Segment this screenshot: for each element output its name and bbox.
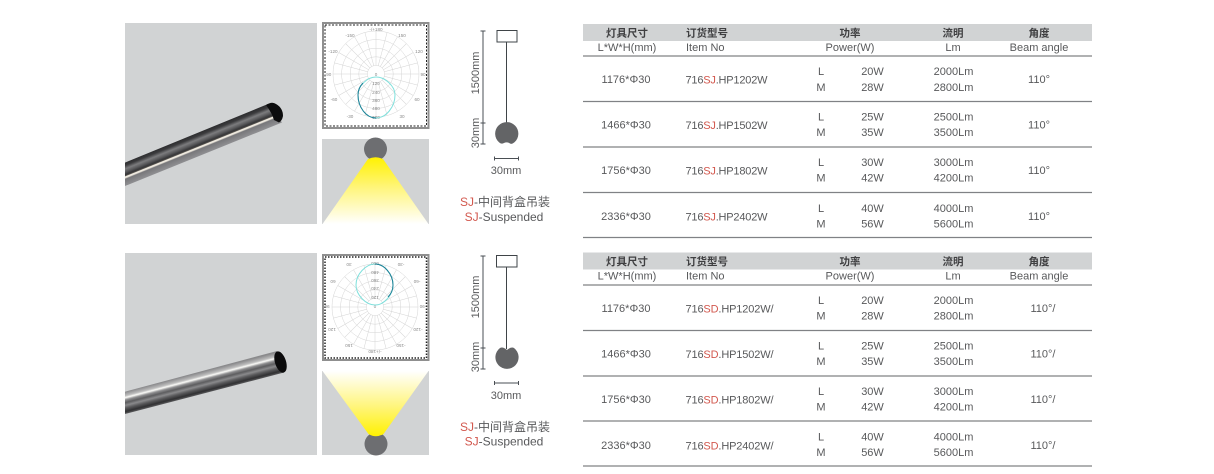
polar labels, inverted: 600 bbox=[371, 261, 379, 266]
table header: Power(W) bbox=[826, 270, 874, 282]
polar labels, inverted: 150 bbox=[345, 343, 353, 348]
row: 1176: M bbox=[816, 310, 826, 322]
polar labels: -120 bbox=[328, 49, 338, 54]
polar labels, inverted: 240 bbox=[371, 286, 379, 291]
row: 1756: 4200Lm bbox=[934, 172, 973, 184]
row: 2336: 4000Lm bbox=[934, 203, 973, 215]
row: 1176: 110°/ bbox=[1030, 303, 1056, 315]
table header: Beam angle bbox=[1010, 270, 1068, 282]
row: 1756 bbox=[601, 157, 1050, 184]
table: bottom specifications bbox=[583, 252, 1092, 466]
polar labels: 120 bbox=[372, 81, 380, 86]
row: 2336: L bbox=[818, 432, 824, 444]
row: 1466: 716SJ.HP1502W bbox=[686, 120, 768, 132]
height label: 1500mm bbox=[470, 276, 482, 318]
row: 1466: 35W bbox=[861, 356, 884, 368]
caption: bottom fixture: SJ-中间背盒吊装 bbox=[460, 419, 550, 434]
row: 1756: 1756*Φ30 bbox=[601, 394, 651, 406]
fixture section circle bbox=[364, 138, 387, 160]
fixture cross section bbox=[495, 122, 518, 144]
polar labels, inverted: 0 bbox=[373, 304, 376, 309]
table header: 灯具尺寸 bbox=[606, 26, 648, 40]
polar labels: 0 bbox=[375, 124, 378, 129]
row: 1176: 2800Lm bbox=[934, 82, 973, 94]
polar labels: -30 bbox=[347, 114, 354, 119]
caption: top fixture: SJ-中间背盒吊装 bbox=[460, 194, 550, 209]
row: 1176: 2000Lm bbox=[934, 66, 973, 78]
row: 1176: 1176*Φ30 bbox=[602, 74, 650, 86]
row: 1756: 110°/ bbox=[1030, 394, 1056, 406]
polar labels, inverted bbox=[324, 254, 426, 354]
light beam bbox=[322, 157, 428, 224]
vertical dimension lines bbox=[480, 31, 486, 144]
row: 2336: 110° bbox=[1028, 211, 1050, 223]
row: 1756: 30W bbox=[861, 157, 884, 169]
row: 2336: L bbox=[818, 203, 824, 215]
row: 1466: 35W bbox=[861, 127, 884, 139]
table header: 角度 bbox=[1028, 255, 1050, 268]
suspension cable bbox=[506, 267, 508, 349]
polar labels, inverted: -/+180 bbox=[368, 349, 382, 354]
row: 1466: 2500Lm bbox=[934, 112, 973, 124]
fixture cross section bbox=[495, 348, 519, 369]
row: 1756: 42W bbox=[861, 172, 884, 184]
row: 2336 bbox=[601, 432, 1056, 459]
lamp body, bottom fixture bbox=[125, 351, 284, 414]
polar labels, inverted: 60 bbox=[330, 279, 336, 284]
row: 1756: L bbox=[818, 157, 824, 169]
row: 2336: M bbox=[816, 447, 826, 459]
polar labels, inverted: 360 bbox=[371, 278, 379, 283]
row: 2336: 5600Lm bbox=[934, 218, 973, 230]
row: 2336: 56W bbox=[861, 218, 884, 230]
row: 2336: 110°/ bbox=[1030, 440, 1056, 452]
row: 1466: 1466*Φ30 bbox=[601, 120, 651, 132]
row: 2336 bbox=[601, 203, 1050, 230]
row: 1466: 3500Lm bbox=[934, 127, 973, 139]
row: 1466 bbox=[601, 340, 1056, 368]
panel: polar light distribution, top fixture bbox=[323, 23, 428, 129]
row: 1466: 110° bbox=[1028, 120, 1050, 132]
polar labels, inverted: 90 bbox=[324, 304, 330, 309]
width label: 30mm bbox=[491, 390, 521, 402]
row: 2336: 2336*Φ30 bbox=[601, 440, 651, 452]
row: 1756: M bbox=[816, 172, 826, 184]
row: 2336: M bbox=[816, 218, 826, 230]
polar labels: -150 bbox=[345, 33, 355, 38]
row: 2336: 716SJ.HP2402W bbox=[686, 212, 768, 224]
row: 1466: 716SD.HP1502W/ bbox=[686, 349, 774, 361]
panel: beam diagram, top fixture bbox=[322, 138, 429, 224]
row: 2336: 2336*Φ30 bbox=[601, 211, 651, 223]
row: 1176: 1176*Φ30 bbox=[602, 303, 650, 315]
row: 1466: 2500Lm bbox=[934, 340, 973, 352]
table header: Beam angle bbox=[1010, 42, 1068, 54]
row: 1176: 2800Lm bbox=[934, 310, 973, 322]
row: 1756: 110° bbox=[1028, 165, 1050, 177]
polar labels, inverted: -30 bbox=[397, 262, 404, 267]
row: 2336: 716SD.HP2402W/ bbox=[686, 440, 774, 452]
table header bbox=[583, 252, 1092, 282]
caption: bottom fixture: SJ-Suspended bbox=[465, 434, 543, 448]
row: 1466: 25W bbox=[861, 112, 884, 124]
row: 1466: M bbox=[816, 356, 826, 368]
row: 1756: 42W bbox=[861, 402, 884, 414]
row: 1756: 716SJ.HP1802W bbox=[686, 166, 768, 178]
row: 1176: L bbox=[818, 66, 824, 78]
panel: mounting dimensions, bottom fixture bbox=[470, 256, 521, 402]
panel: polar light distribution, bottom fixture bbox=[323, 254, 428, 360]
polar labels, inverted: -90 bbox=[419, 304, 426, 309]
polar labels, inverted: -60 bbox=[413, 279, 420, 284]
row: 1466: 1466*Φ30 bbox=[601, 348, 651, 360]
polar labels: 240 bbox=[372, 90, 380, 95]
polar grid bbox=[332, 264, 418, 350]
row: 2336: 56W bbox=[861, 447, 884, 459]
ceiling box bbox=[497, 30, 517, 42]
table header: 功率 bbox=[840, 26, 861, 40]
polar labels: 150 bbox=[398, 33, 406, 38]
row: 1466: 25W bbox=[861, 340, 884, 352]
row: 1176: 716SD.HP1202W/ bbox=[686, 304, 774, 316]
row: 2336: 5600Lm bbox=[934, 447, 973, 459]
polar curve bbox=[358, 77, 395, 118]
table header: Lm bbox=[945, 42, 961, 54]
polar labels: 60 bbox=[414, 97, 420, 102]
table header: L*W*H(mm) bbox=[598, 42, 656, 54]
row: 1466 bbox=[601, 112, 1050, 139]
table header: 功率 bbox=[840, 255, 861, 268]
row: 1756: 3000Lm bbox=[934, 157, 973, 169]
drop label: 30mm bbox=[470, 118, 482, 148]
fixture section circle bbox=[364, 432, 388, 456]
table header: 流明 bbox=[942, 26, 964, 40]
panel: mounting dimensions, top fixture bbox=[470, 30, 521, 177]
row: 1176: 2000Lm bbox=[934, 295, 973, 307]
panel: product photo, bottom fixture bbox=[125, 253, 317, 455]
polar labels, inverted: -120 bbox=[413, 327, 423, 332]
table header bbox=[583, 24, 1092, 54]
row: 1756: 1756*Φ30 bbox=[601, 165, 651, 177]
row: 1176: 28W bbox=[861, 82, 884, 94]
row: 1756: 4200Lm bbox=[934, 402, 973, 414]
light beam bbox=[322, 371, 428, 436]
table header: Item No bbox=[686, 42, 725, 54]
polar curve bbox=[356, 264, 393, 305]
polar labels, inverted: 480 bbox=[371, 270, 379, 275]
lamp end cap, top fixture bbox=[266, 103, 283, 122]
width label: 30mm bbox=[491, 165, 521, 177]
table header: L*W*H(mm) bbox=[598, 270, 656, 282]
row: 1176: 20W bbox=[861, 66, 884, 78]
polar labels, inverted: 120 bbox=[371, 295, 379, 300]
row: 1756: 716SD.HP1802W/ bbox=[686, 394, 774, 406]
row: 1176: 20W bbox=[861, 295, 884, 307]
lamp body, top fixture bbox=[125, 104, 282, 186]
table header: Power(W) bbox=[826, 42, 874, 54]
table header: Lm bbox=[945, 270, 961, 282]
polar labels: 480 bbox=[372, 106, 380, 111]
panel: beam diagram, bottom fixture bbox=[322, 371, 429, 456]
vertical dimension lines bbox=[480, 256, 486, 369]
polar labels bbox=[325, 27, 426, 129]
panel: product photo, top fixture bbox=[125, 23, 317, 224]
row: 2336: 4000Lm bbox=[934, 432, 973, 444]
table header: 灯具尺寸 bbox=[606, 255, 648, 268]
table: top specifications bbox=[583, 24, 1092, 238]
row: 1756: L bbox=[818, 386, 824, 398]
row: 1466: 3500Lm bbox=[934, 356, 973, 368]
polar labels: 90 bbox=[420, 72, 426, 77]
row: 2336: 40W bbox=[861, 432, 884, 444]
row: 1756: 3000Lm bbox=[934, 386, 973, 398]
polar labels: -90 bbox=[325, 72, 332, 77]
row: 1756 bbox=[601, 386, 1056, 414]
horizontal dimension line bbox=[494, 156, 518, 160]
polar labels: 30 bbox=[399, 114, 405, 119]
row: 1176: L bbox=[818, 295, 824, 307]
polar labels: 600 bbox=[372, 115, 380, 120]
drop label: 30mm bbox=[470, 342, 482, 372]
lamp end cap, bottom fixture bbox=[272, 350, 289, 374]
polar labels: -60 bbox=[331, 97, 338, 102]
suspension cable bbox=[506, 42, 508, 123]
polar labels, inverted: 30 bbox=[346, 262, 352, 267]
row: 2336: 40W bbox=[861, 203, 884, 215]
ceiling box bbox=[496, 256, 517, 267]
polar labels, inverted: 120 bbox=[328, 327, 336, 332]
row: 1466: 110°/ bbox=[1030, 348, 1056, 360]
row: 1176 bbox=[602, 66, 1050, 94]
polar labels: -/+180 bbox=[369, 27, 383, 32]
table header: 订货型号 bbox=[686, 26, 728, 40]
row: 1756: M bbox=[816, 402, 826, 414]
row: 1466: L bbox=[818, 112, 824, 124]
polar labels: 360 bbox=[372, 98, 380, 103]
table header: Item No bbox=[686, 270, 725, 282]
row: 1466: M bbox=[816, 127, 826, 139]
horizontal dimension line bbox=[494, 381, 518, 385]
height label: 1500mm bbox=[470, 52, 482, 94]
caption: bottom fixture bbox=[460, 419, 550, 448]
table header: 流明 bbox=[942, 255, 964, 268]
row: 1466: L bbox=[818, 340, 824, 352]
polar labels: 120 bbox=[415, 49, 423, 54]
polar labels, inverted: 0 bbox=[373, 254, 376, 259]
polar labels: 0 bbox=[375, 72, 378, 77]
table header: 角度 bbox=[1028, 26, 1050, 40]
polar grid bbox=[333, 31, 419, 117]
caption: top fixture bbox=[460, 194, 550, 224]
caption: top fixture: SJ-Suspended bbox=[465, 210, 543, 224]
row: 1176 bbox=[602, 295, 1056, 322]
row: 1176: 110° bbox=[1028, 74, 1050, 86]
polar labels, inverted: -150 bbox=[396, 343, 406, 348]
row: 1176: 28W bbox=[861, 310, 884, 322]
row: 1756: 30W bbox=[861, 386, 884, 398]
row: 1176: M bbox=[816, 82, 826, 94]
row: 1176: 716SJ.HP1202W bbox=[686, 74, 768, 86]
table header: 订货型号 bbox=[686, 255, 728, 268]
